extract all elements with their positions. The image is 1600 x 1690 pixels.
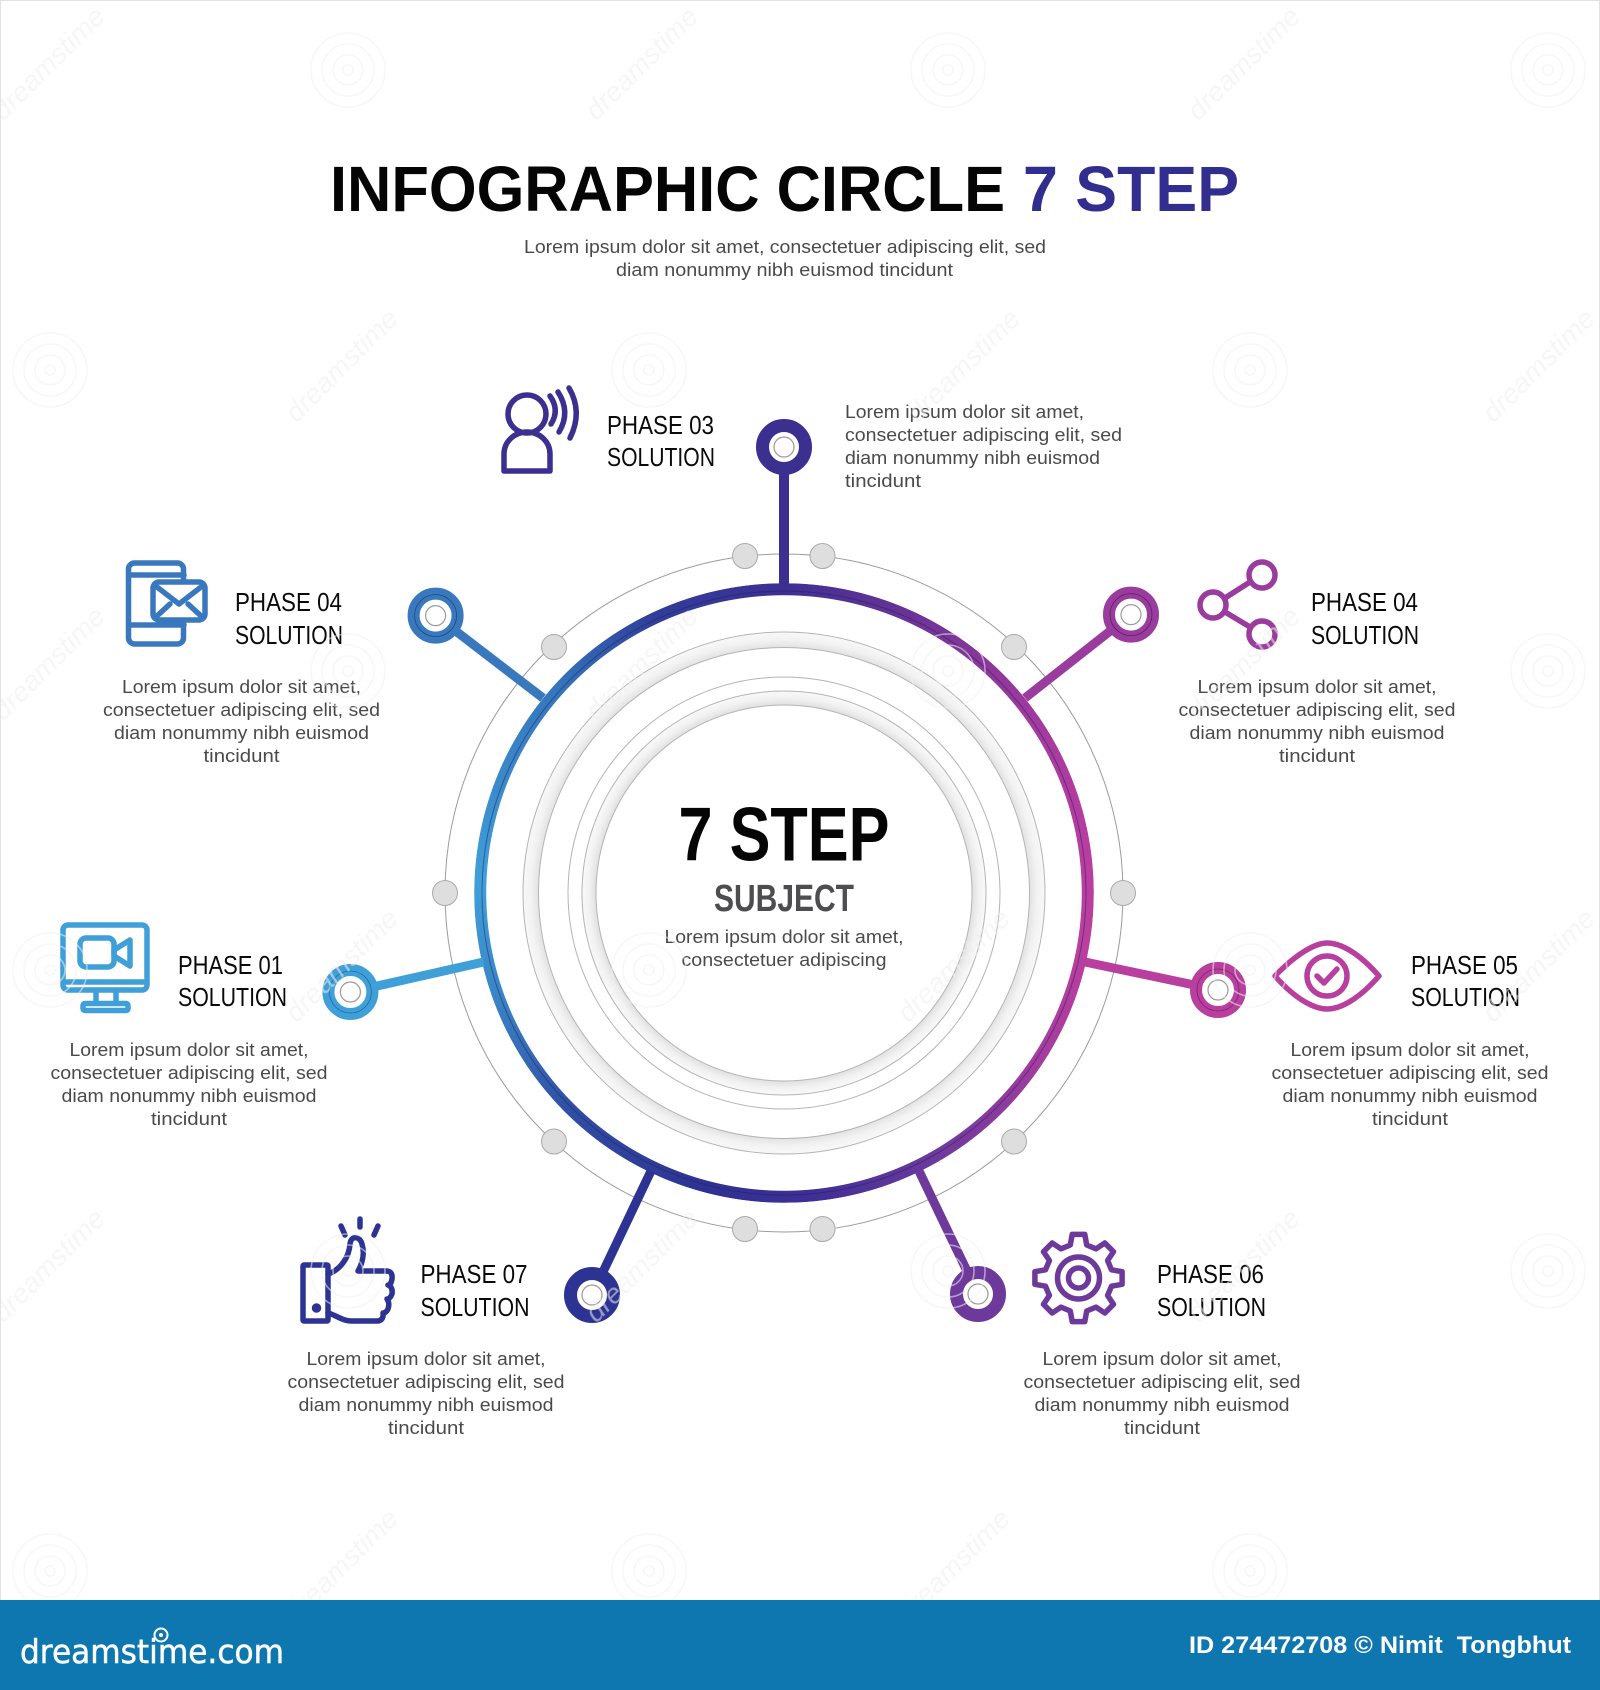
phase 06 node and spoke	[919, 1171, 1000, 1316]
phase 01 heading	[178, 950, 287, 1012]
watermark pattern: dreamstime	[1476, 903, 1600, 1028]
center text: 7 STEP	[678, 792, 890, 878]
subtitle: diam nonummy nibh euismod tincidunt	[616, 260, 953, 280]
title: INFOGRAPHIC CIRCLE	[330, 153, 1005, 225]
phase 03 text: consectetuer adipiscing elit, sed	[845, 425, 1122, 445]
icon: monitor with video camera	[63, 925, 147, 1010]
icon: phone with envelope	[128, 563, 205, 644]
phase 04 left heading: PHASE 04	[235, 587, 342, 617]
icon: gear	[1035, 1234, 1122, 1322]
phase 07 text: consectetuer adipiscing elit, sed	[288, 1372, 564, 1392]
phase 07 heading	[420, 1259, 530, 1322]
phase 05 heading: SOLUTION	[1411, 982, 1520, 1012]
watermark pattern: dreamstime	[279, 1503, 404, 1628]
phase 07 heading: PHASE 07	[420, 1259, 528, 1289]
phase 01 heading: PHASE 01	[178, 950, 283, 980]
phase 03 node and spoke	[762, 426, 806, 588]
phase 06 heading: SOLUTION	[1157, 1292, 1266, 1322]
phase 07 text: Lorem ipsum dolor sit amet,	[306, 1349, 546, 1369]
phase 07 heading: SOLUTION	[420, 1292, 530, 1322]
center text	[664, 792, 904, 970]
phase 04 left text: diam nonummy nibh euismod	[114, 723, 369, 743]
phase 06 text: consectetuer adipiscing elit, sed	[1024, 1372, 1300, 1392]
phase 04 left node and spoke	[414, 594, 543, 698]
phase 03 text: tincidunt	[845, 471, 921, 491]
phase 01 node and spoke	[328, 962, 484, 1014]
phase 05 text	[1272, 1040, 1548, 1129]
phase 06 heading: PHASE 06	[1157, 1259, 1264, 1289]
center text: SUBJECT	[714, 878, 854, 920]
phase 04 right heading	[1311, 587, 1419, 650]
center text: consectetuer adipiscing	[682, 950, 886, 970]
phase 04 right heading: SOLUTION	[1311, 620, 1419, 650]
phase 03 text	[845, 402, 1122, 491]
subtitle: Lorem ipsum dolor sit amet, consectetuer adipiscing elit, sed	[524, 237, 1046, 257]
footer bar	[0, 1600, 1600, 1690]
phase 01 text: tincidunt	[151, 1109, 227, 1129]
main ring inner hairline	[482, 591, 1086, 1195]
watermark pattern: dreamstime	[579, 601, 704, 726]
phase 07 text	[288, 1349, 564, 1438]
icon: person with signal waves	[504, 388, 576, 471]
phase 06 text	[1024, 1349, 1300, 1438]
center text: Lorem ipsum dolor sit amet,	[664, 927, 904, 947]
watermark pattern: dreamstime	[891, 1503, 1016, 1628]
phase 04 right text	[1178, 677, 1456, 766]
phase 04 right text: consectetuer adipiscing elit, sed	[1178, 700, 1456, 720]
phase 05 node and spoke	[1085, 962, 1240, 1012]
icon: share nodes	[1200, 562, 1275, 647]
watermark pattern: dreamstime	[1181, 1, 1306, 126]
phase 05 heading	[1411, 950, 1520, 1012]
phase 04 right text: Lorem ipsum dolor sit amet,	[1198, 677, 1436, 697]
title: 7 STEP	[1023, 153, 1239, 225]
watermark pattern: dreamstime	[579, 1, 704, 126]
inner concentric grey rings	[523, 632, 1045, 1154]
watermark pattern: dreamstime	[279, 903, 404, 1028]
subtitle	[524, 237, 1046, 280]
phase 04 right text: tincidunt	[1279, 746, 1355, 766]
phase 01 text: diam nonummy nibh euismod	[62, 1086, 316, 1106]
phase 07 node and spoke	[570, 1171, 651, 1316]
outer thin dotted orbit	[432, 544, 1136, 1242]
icon: eye with check	[1275, 943, 1379, 1009]
phase 04 right heading: PHASE 04	[1311, 587, 1418, 617]
phase 04 right node and spoke	[1025, 593, 1153, 698]
phase 05 text: Lorem ipsum dolor sit amet,	[1290, 1040, 1530, 1060]
phase 03 heading: PHASE 03	[607, 410, 714, 440]
phase 05 text: tincidunt	[1372, 1109, 1448, 1129]
phase 06 text: diam nonummy nibh euismod	[1034, 1395, 1290, 1415]
phase 03 text: Lorem ipsum dolor sit amet,	[845, 402, 1084, 422]
phase 05 text: diam nonummy nibh euismod	[1282, 1086, 1538, 1106]
phase 04 right text: diam nonummy nibh euismod	[1190, 723, 1444, 743]
phase 01 text	[50, 1040, 328, 1129]
phase 05 heading: PHASE 05	[1411, 950, 1518, 980]
phase 01 heading: SOLUTION	[178, 982, 287, 1012]
center main gradient ring	[474, 583, 1094, 1203]
phase 06 text: Lorem ipsum dolor sit amet,	[1042, 1349, 1282, 1369]
phase 07 text: diam nonummy nibh euismod	[298, 1395, 554, 1415]
phase 04 left text: Lorem ipsum dolor sit amet,	[122, 677, 361, 697]
watermark pattern: dreamstime	[579, 1203, 704, 1328]
phase 04 left text: tincidunt	[204, 746, 280, 766]
phase 04 left heading: SOLUTION	[235, 620, 343, 650]
phase 01 text: consectetuer adipiscing elit, sed	[50, 1063, 328, 1083]
phase 01 text: Lorem ipsum dolor sit amet,	[70, 1040, 308, 1060]
phase 06 text: tincidunt	[1124, 1418, 1200, 1438]
phase 06 heading	[1157, 1259, 1266, 1322]
watermark pattern: dreamstime	[1476, 303, 1600, 428]
phase 03 heading	[607, 410, 715, 472]
phase 04 left heading	[235, 587, 343, 650]
footer bar: dreamstime.com	[20, 1632, 284, 1671]
phase 05 text: consectetuer adipiscing elit, sed	[1272, 1063, 1548, 1083]
phase 03 text: diam nonummy nibh euismod	[845, 448, 1100, 468]
footer bar: ID 274472708 © Nimit Tongbhut	[1189, 1632, 1571, 1659]
phase 04 left text: consectetuer adipiscing elit, sed	[103, 700, 380, 720]
watermark pattern: dreamstime	[1181, 601, 1306, 726]
phase 03 heading: SOLUTION	[607, 442, 715, 472]
watermark pattern: dreamstime	[279, 303, 404, 428]
watermark pattern: dreamstime	[1181, 1203, 1306, 1328]
watermark pattern: dreamstime	[891, 903, 1016, 1028]
phase 07 text: tincidunt	[388, 1418, 464, 1438]
watermark pattern: dreamstime	[901, 303, 1026, 428]
phase 04 left text	[103, 677, 380, 766]
icon: thumbs up	[303, 1219, 392, 1321]
